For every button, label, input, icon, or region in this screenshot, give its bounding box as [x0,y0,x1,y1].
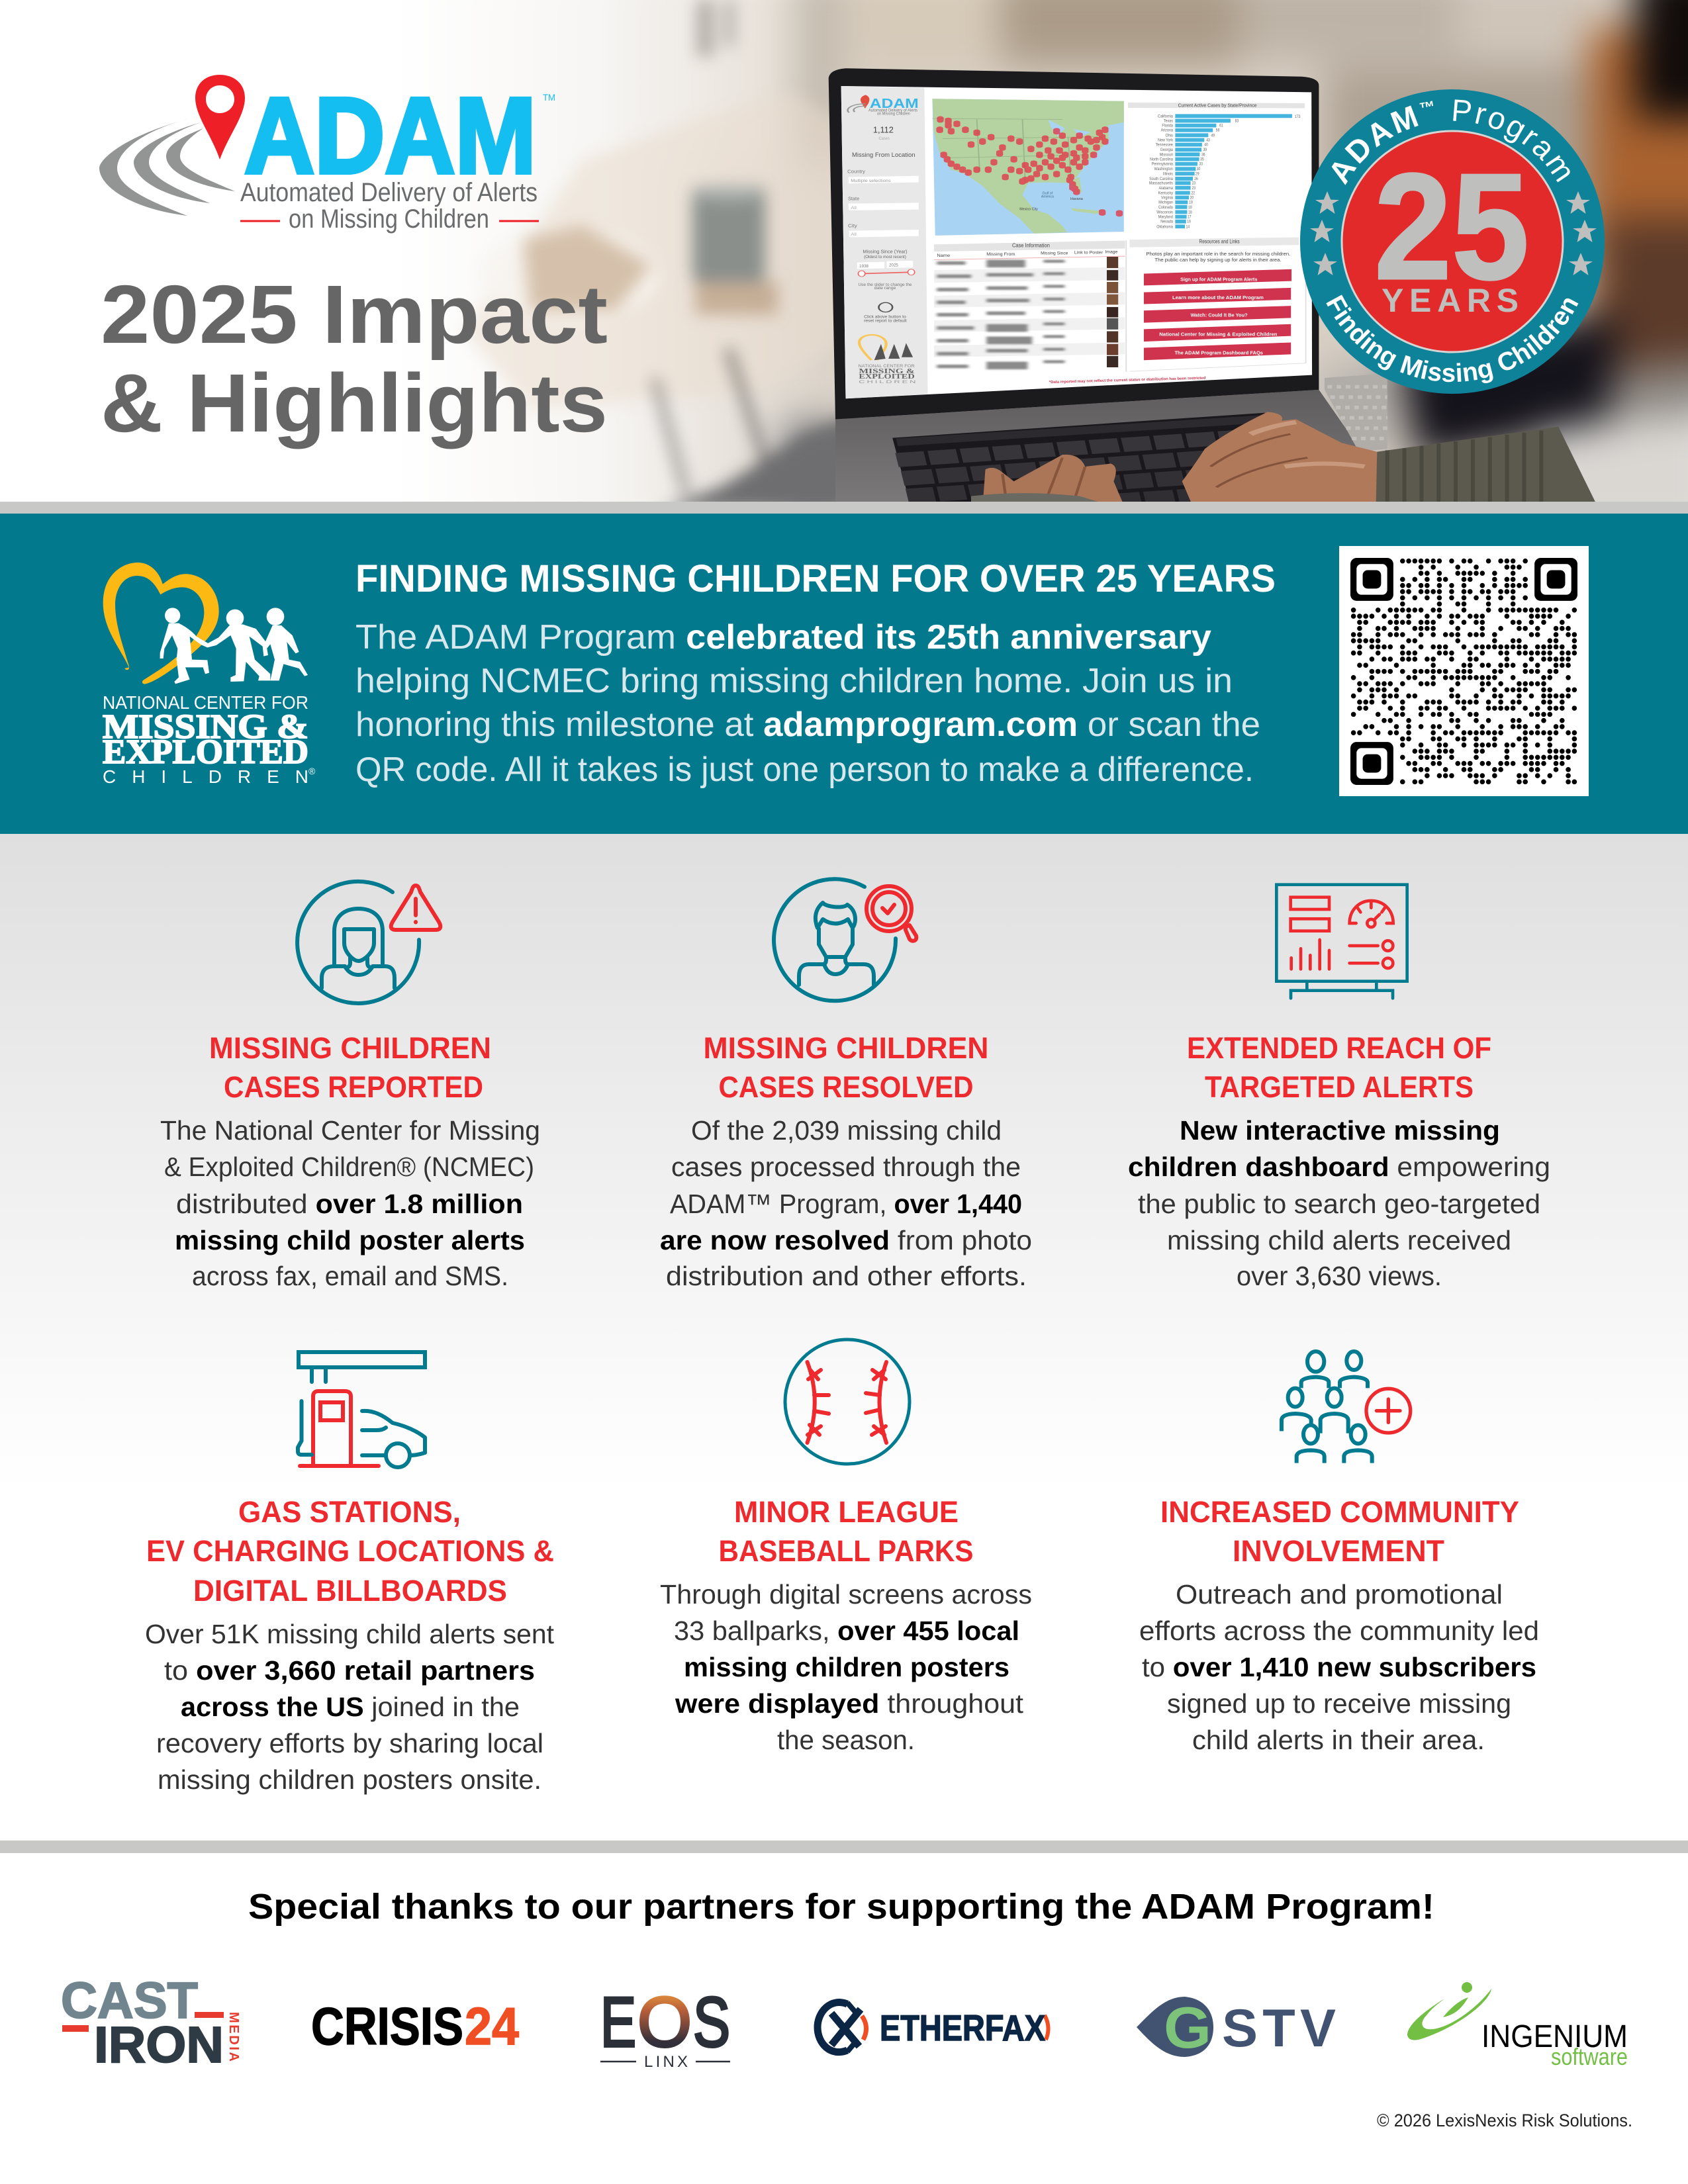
logo: ADAM [99,75,555,234]
dashboard sidebar: 2025 [889,263,898,268]
heading: MISSING CHILDREN [209,1031,491,1065]
heading [1160,1495,1519,1568]
text block: signed up to receive missing [1167,1688,1511,1719]
icon: resolved case search [774,879,916,1001]
dashboard bar chart: Colorado [1158,205,1173,210]
dashboard bar chart: 30 [1197,167,1200,171]
dashboard case information table: Name [937,253,950,258]
banner text: QR code. All it takes is just one person to make a difference. [355,751,1254,789]
highlight: missing children cases reported [160,882,540,1291]
text block: Over 51K missing child alerts sent [145,1619,555,1649]
logo: EOS Linx: LINX [644,2053,688,2071]
dashboard sidebar: Missing Since (Year) [863,250,908,255]
dashboard bar chart: Kentucky [1158,191,1174,196]
dashboard sidebar: State [848,196,859,201]
dashboard bar chart: 14 [1186,225,1190,229]
heading: MINOR LEAGUE [734,1495,959,1529]
logo: Cast Iron Media: IRON [94,2017,224,2073]
text block [660,1579,1032,1755]
dashboard bar chart: Arizona [1161,128,1173,133]
dashboard bar chart: Washington [1154,167,1173,171]
dashboard bar chart: Illinois [1163,171,1173,177]
logo: etherFAX: ETHERFAX [880,2007,1045,2048]
dashboard case information table: Missing Since [1041,251,1068,255]
badge: 25 years: Finding Missing Children [1320,291,1585,388]
panel: hero photo [102,0,1688,502]
dashboard bar chart: Michigan [1158,200,1173,205]
dashboard sidebar: EXPLOITED [859,372,915,381]
dashboard sidebar: City [848,223,857,228]
divider bar: top [0,502,1688,514]
badge: 25 years: YEARS [1382,282,1519,319]
dashboard case information table: Case Information [1012,243,1050,249]
dashboard sidebar: date range [874,286,896,291]
text block: 33 ballparks, over 455 local [674,1615,1019,1646]
dashboard bar chart: Texas [1164,118,1173,124]
icon: gas station and car [298,1352,425,1467]
logo: ADAM: on Missing Children [289,205,489,234]
dashboard bar chart: Missouri [1160,152,1173,158]
badge: 25 years: Program [1453,99,1570,183]
dashboard bar chart: New York [1158,138,1174,143]
dashboard bar chart: 83 [1235,119,1239,124]
dashboard bar chart: 22 [1191,191,1195,196]
text block [160,1115,540,1291]
logo: Crisis24: 24 [465,1997,519,2056]
title [101,269,608,449]
logo: NCMEC [103,563,316,787]
badge: 25 years: ™ [1419,101,1433,108]
laptop [829,68,1598,514]
dashboard resources and links: The public can help by signing up for alerts in their area. [1154,257,1282,263]
dashboard case information table: Link to Poster [1074,250,1103,255]
laptop lid [829,68,1319,420]
dashboard bar chart: 19 [1189,201,1193,205]
logo wordmark: ADAM [244,75,536,196]
banner text: The ADAM Program celebrated its 25th anniversary [355,618,1211,657]
logo: EOS Linx: E [600,1982,636,2062]
logo: EOS Linx: O [637,1982,692,2062]
logo pin [195,75,245,159]
text block: were displayed throughout [675,1688,1024,1719]
heading: EXTENDED REACH OF [1187,1031,1491,1065]
text block: The National Center for Missing [160,1115,540,1146]
text block: across fax, email and SMS. [192,1261,508,1291]
logo: Ingenium Software: software [1551,2043,1628,2070]
dashboard bar chart: Florida [1162,123,1173,128]
dashboard bar chart: 36 [1201,153,1205,158]
dashboard sidebar: Automated Delivery of Alerts [868,108,917,113]
logo: Cast Iron Media [61,1972,241,2073]
dashboard bar chart: 56 [1216,128,1219,133]
text block: Of the 2,039 missing child [691,1115,1002,1146]
heading [209,1031,491,1104]
heading: TARGETED ALERTS [1205,1070,1474,1104]
banner text: helping NCMEC bring missing children home. Join us in [355,662,1233,700]
dashboard bar chart: Oklahoma [1156,224,1173,229]
dashboard map: Mexico City [1019,207,1038,211]
badge: 25 years [1300,89,1605,394]
dashboard bar chart: 26 [1194,177,1198,181]
icon: community group with plus [1282,1351,1411,1463]
dashboard case information table: Missing From [986,252,1015,257]
dashboard sidebar [841,86,928,398]
icon: missing child alert [297,882,440,1003]
dashboard sidebar: Multiple selections [851,179,891,183]
dashboard resources and links [1129,238,1306,371]
text block: cases processed through the [671,1152,1021,1182]
dashboard bar chart: Maryland [1158,214,1173,220]
divider bar: bottom [0,1841,1688,1853]
heading [719,1495,973,1568]
highlight: gas stations, EV charging locations and digital billboards [145,1352,555,1795]
logo: Crisis24: CRISIS [311,1997,463,2056]
dashboard sidebar: Cases [878,136,890,141]
logo: Ingenium Software: INGENIUM [1481,2019,1628,2054]
dashboard bar chart: Nevada [1160,219,1173,224]
white fade to the left [0,0,861,502]
dashboard bar chart: 18 [1188,205,1192,210]
dashboard resources and links: Sign up for ADAM Program Alerts [1180,277,1257,283]
text block: children dashboard empowering [1128,1152,1550,1182]
icon: baseball [785,1340,910,1464]
logo: NCMEC: NATIONAL CENTER FOR [103,692,308,713]
partner logos [61,1972,1628,2073]
dashboard sidebar: 1,112 [873,126,894,135]
dashboard map [932,99,1124,236]
dashboard bar chart: 17 [1188,215,1192,220]
text block: missing child alerts received [1167,1225,1511,1255]
logo: NCMEC: CHILDREN [103,766,308,787]
badge: 25 years: 25 [1374,143,1529,311]
text block [1139,1579,1539,1755]
text block [145,1619,555,1795]
title: 2025 Impact [101,269,608,361]
dashboard bar chart: 35 [1200,158,1204,162]
laptop base [835,389,1356,502]
banner heading: FINDING MISSING CHILDREN FOR OVER 25 YEARS [355,557,1276,600]
dashboard bar chart [1128,103,1305,229]
text block [660,1115,1032,1291]
dashboard sidebar: All [851,206,857,210]
dashboard bar chart: North Carolina [1150,157,1173,162]
text block: recovery efforts by sharing local [156,1728,543,1758]
heading [146,1495,554,1608]
text block: to over 3,660 retail partners [164,1655,535,1686]
dashboard bar chart: Virginia [1161,195,1173,201]
dashboard bar chart: Tennessee [1156,142,1173,148]
text block: New interactive missing [1180,1115,1500,1146]
dashboard bar chart: 33 [1199,162,1203,167]
table objects [463,0,861,510]
heading: GAS STATIONS, [238,1495,461,1529]
dashboard bar chart: Pennsylvania [1152,161,1173,167]
dashboard resources and links: National Center for Missing & Exploited Children [1159,332,1278,338]
dashboard bar chart: 16 [1187,220,1191,224]
heading: INCREASED COMMUNITY [1160,1495,1519,1529]
badge: 25 years: ADAM [1332,106,1419,185]
dashboard sidebar: Click above button to [864,314,906,319]
dashboard bar chart: Current Active Cases by State/Province [1178,103,1257,109]
partners heading: Special thanks to our partners for supporting the ADAM Program! [248,1887,1434,1927]
dashboard sidebar: Missing From Location [852,152,915,158]
dashboard bar chart: Georgia [1160,148,1173,152]
dashboard resources and links: Photos play an important role in the search for missing children. [1146,251,1290,257]
logo: NCMEC: MISSING & [103,708,308,746]
heading [703,1031,989,1104]
heading: INVOLVEMENT [1233,1534,1444,1568]
dashboard bar chart: Alabama [1159,185,1173,191]
dashboard sidebar: reset report to default [864,318,907,324]
dashboard bar chart: 23 [1192,181,1196,186]
copyright: © 2026 LexisNexis Risk Solutions. [1377,2111,1632,2130]
dashboard sidebar: CHILDREN [859,380,915,385]
dashboard bar chart: 40 [1204,143,1208,148]
logo: Cast Iron Media: MEDIA [226,2012,241,2062]
text block: missing child poster alerts [175,1225,525,1255]
dashboard bar chart: 20 [1190,196,1194,201]
text block: missing children posters [684,1652,1009,1682]
icon: dashboard monitor [1276,885,1407,998]
text block: distributed over 1.8 million [176,1189,523,1219]
banner text: honoring this milestone at adamprogram.com or scan the [355,705,1260,744]
logo swooshes [99,119,235,216]
text block: the season. [777,1725,915,1755]
dashboard bar chart: Wisconsin [1156,210,1173,215]
dashboard bar chart: 61 [1219,124,1223,128]
text block [1128,1115,1550,1291]
dashboard sidebar: (Oldest to most recent) [864,255,906,259]
text block: the public to search geo-targeted [1138,1189,1540,1219]
dashboard sidebar: All [851,232,857,237]
text block: Through digital screens across [660,1579,1032,1610]
dashboard resources and links: The ADAM Program Dashboard FAQs [1174,350,1263,355]
title: & Highlights [101,357,608,449]
heading: CASES RESOLVED [719,1070,973,1104]
banner text [355,618,1260,789]
dashboard bar chart: Ohio [1165,133,1173,138]
dashboard sidebar: 1938 [859,264,868,269]
text block: efforts across the community led [1139,1615,1539,1646]
heading: EV CHARGING LOCATIONS & [146,1534,554,1568]
logo: Ingenium Software [1407,1982,1628,2070]
heading: DIGITAL BILLBOARDS [193,1574,507,1608]
panel: teal banner [0,514,1688,834]
logo: ADAM: Automated Delivery of Alerts [240,178,538,207]
text block: missing children posters onsite. [158,1764,541,1795]
dashboard bar chart: South Carolina [1149,176,1173,181]
highlight: missing children cases resolved [660,879,1032,1291]
logo: GSTV: G [1164,1995,1211,2060]
dashboard bar chart: 39 [1203,148,1207,152]
dashboard bar chart: 43 [1206,138,1210,143]
dashboard bar chart: 29 [1196,172,1199,177]
dashboard resources and links: Learn more about the ADAM Program [1172,295,1264,300]
dashboard case information table: Image [1105,250,1118,255]
dashboard resources and links: Watch: Could It Be You? [1191,312,1248,318]
text block: Outreach and promotional [1176,1579,1503,1610]
text block: & Exploited Children® (NCMEC) [164,1152,534,1182]
heading: CASES REPORTED [224,1070,483,1104]
text block: to over 1,410 new subscribers [1142,1652,1536,1682]
logo: NCMEC: ® [308,766,316,776]
logo: GSTV: STV [1222,1999,1336,2058]
logo: EOS Linx [600,1982,730,2071]
logo: GSTV [1137,1995,1336,2060]
text block: ADAM™ Program, over 1,440 [670,1189,1022,1219]
QR code [1339,546,1589,796]
dashboard sidebar: on Missing Children [877,111,910,116]
dashboard screen [841,86,1312,398]
highlight: minor league baseball parks [660,1340,1032,1755]
dashboard bar chart: Massachusetts [1149,181,1173,186]
dashboard map: America [1041,195,1054,199]
dashboard sidebar: Use the slider to change the [858,283,912,287]
dashboard case information table [934,240,1126,372]
heading: MISSING CHILDREN [703,1031,989,1065]
text block: across the US joined in the [181,1692,520,1722]
logo: Cast Iron Media: CAST [61,1972,198,2029]
dashboard sidebar: ADAM [870,95,919,111]
dashboard resources and links: Resources and Links [1199,238,1240,244]
text block: over 3,630 views. [1237,1261,1442,1291]
dashboard map: Gulf of [1043,191,1053,195]
photo background: blurred room and person [536,0,1688,502]
hands and sleeve [971,373,1598,508]
dashboard bar chart: California [1158,114,1173,119]
dashboard bar chart: 23 [1192,186,1196,191]
highlight: increased community involvement [1139,1351,1539,1755]
dashboard sidebar: MISSING & [859,367,915,375]
logo: etherFAX [818,2003,1049,2052]
logo: NCMEC: EXPLOITED [103,733,308,771]
logo: ADAM: TM [543,92,555,103]
dashboard disclaimer: *Data reported may not reflect the current status or distribution has been restricted [1049,375,1206,384]
dashboard map: Havana [1070,197,1083,201]
text block: child alerts in their area. [1192,1725,1485,1755]
dashboard bar chart: 173 [1295,115,1300,119]
heading [1187,1031,1491,1104]
dashboard sidebar: NATIONAL CENTER FOR [858,364,915,369]
dashboard bar chart: 18 [1188,210,1192,215]
text block: distribution and other efforts. [666,1261,1027,1291]
highlight: extended reach of targeted alerts [1128,885,1550,1291]
heading: BASEBALL PARKS [719,1534,973,1568]
text block: are now resolved from photo [660,1225,1032,1255]
dashboard bar chart: 49 [1211,134,1215,138]
keyboard [892,413,1336,514]
logo: EOS Linx: S [693,1982,730,2062]
dashboard sidebar: Country [847,169,865,175]
panel: highlights background [0,834,1688,1489]
